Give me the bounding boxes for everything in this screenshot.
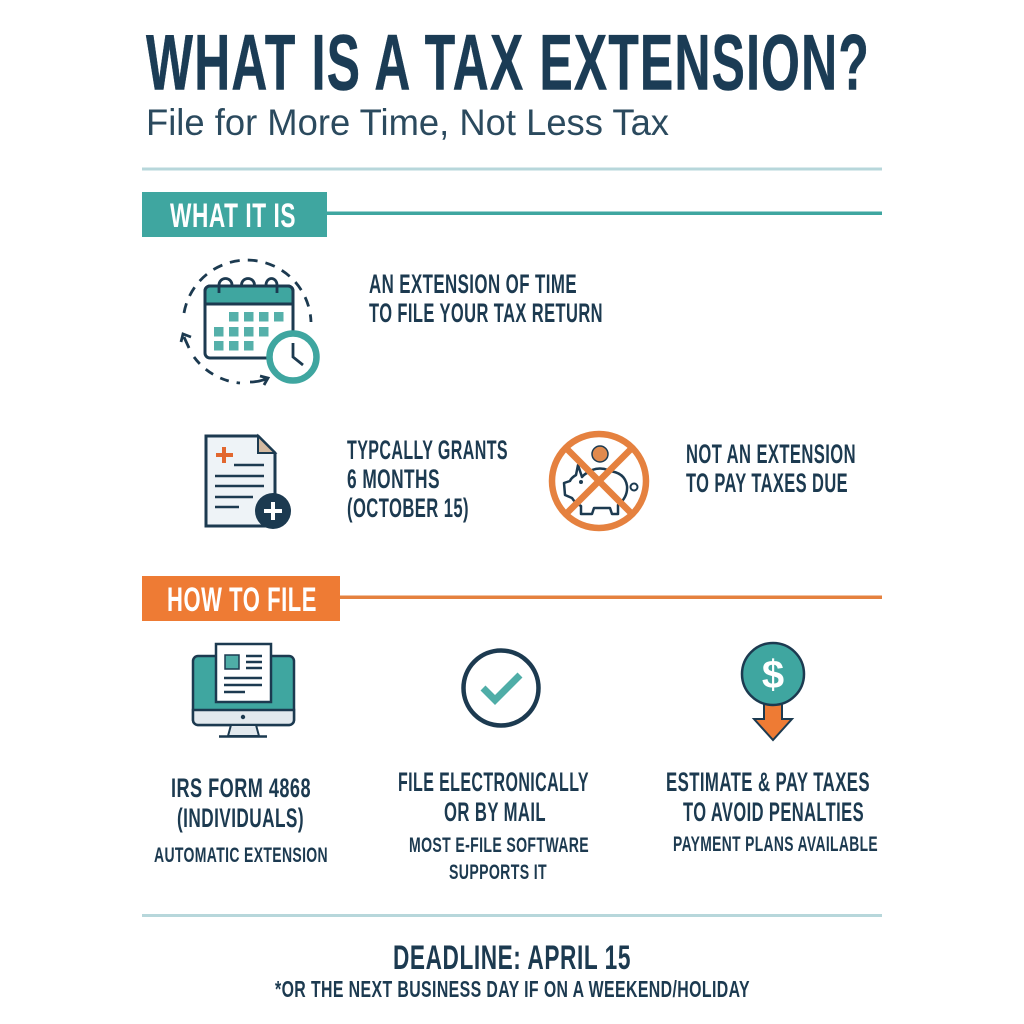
icon: crossed-out piggy bank <box>552 434 646 528</box>
deadline: DEADLINE: APRIL 15 <box>393 939 631 977</box>
text: file electronically or by mail: SUPPORTS IT <box>449 861 547 884</box>
text: irs form 4868 <box>154 773 328 867</box>
text: an extension of time: TO FILE YOUR TAX RETURN <box>369 298 603 328</box>
section header: what it is: WHAT IT IS <box>170 197 296 235</box>
text: estimate and pay taxes <box>666 767 878 856</box>
section header: how to file: HOW TO FILE <box>167 581 317 619</box>
text: not an extension to pay <box>686 439 856 498</box>
icon: document with plus <box>206 436 291 529</box>
text: typically grants 6 months: TYPCALLY GRANTS <box>347 435 508 465</box>
icon: computer with form <box>193 644 294 736</box>
footnote: *OR THE NEXT BUSINESS DAY IF ON A WEEKEND/HOLIDAY <box>275 976 750 1002</box>
text: file electronically or by mail: FILE ELECTRONICALLY <box>398 767 589 797</box>
text: estimate and pay taxes: PAYMENT PLANS AVAILABLE <box>673 833 878 856</box>
text: not an extension to pay: NOT AN EXTENSION <box>686 439 856 469</box>
icon: dollar coin with down arrow: $ <box>762 653 784 697</box>
icon: check mark circle <box>464 650 538 726</box>
text: irs form 4868: (INDIVIDUALS) <box>177 803 304 833</box>
text: typically grants 6 months <box>347 435 508 523</box>
icon: dollar coin with down arrow <box>742 643 804 740</box>
text: an extension of time: AN EXTENSION OF TIME <box>369 269 577 299</box>
subtitle: File for More Time, Not Less Tax <box>146 102 669 143</box>
text: file electronically or by mail: MOST E-FILE SOFTWARE <box>409 834 589 857</box>
text: an extension of time <box>369 269 603 328</box>
text: typically grants 6 months: (OCTOBER 15) <box>347 493 469 523</box>
section header: what it is <box>142 192 882 237</box>
text: irs form 4868: IRS FORM 4868 <box>171 773 311 803</box>
text: estimate and pay taxes: ESTIMATE & PAY TAXES <box>666 767 870 797</box>
section header: how to file <box>142 576 882 621</box>
text: not an extension to pay: TO PAY TAXES DUE <box>686 468 848 498</box>
text: irs form 4868: AUTOMATIC EXTENSION <box>154 844 328 867</box>
text: estimate and pay taxes: TO AVOID PENALTIES <box>683 797 864 827</box>
text: file electronically or by mail: OR BY MAIL <box>444 797 546 827</box>
text: file electronically or by mail <box>398 767 589 884</box>
text: typically grants 6 months: 6 MONTHS <box>347 464 440 494</box>
icon: calendar with clock <box>181 260 316 385</box>
